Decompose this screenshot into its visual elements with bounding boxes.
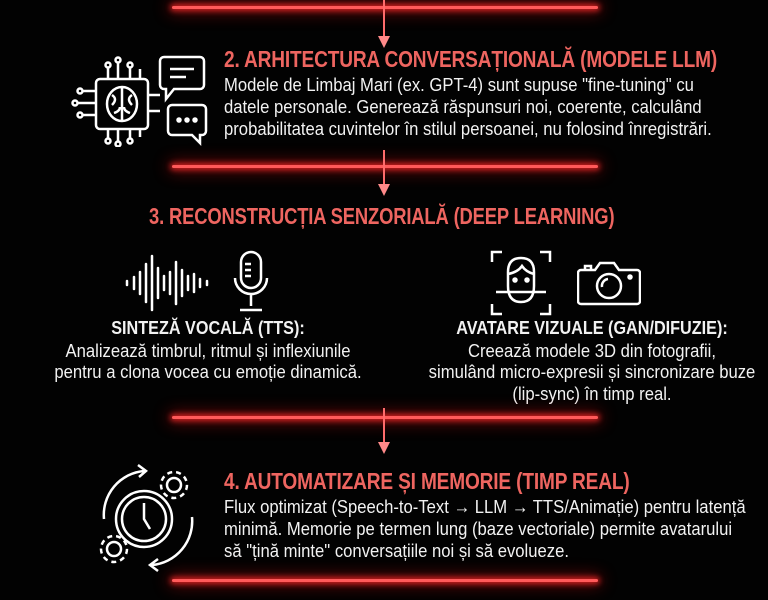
label: voice synthesis: SINTEZĂ VOCALĂ (TTS): [111,318,305,338]
icon: clock with gears and cycle [100,464,194,572]
arrow 3 [378,408,390,454]
body 4: să "țină minte" conversațiile noi și să evolueze. [224,540,569,561]
icon: microphone [234,250,268,312]
label: visual avatars: Creează modele 3D din fotografii, [468,340,716,360]
body 2: probabilitatea cuvintelor în stilul persoanei, nu folosind înregistrări. [224,118,712,139]
icon: waveform [126,254,208,312]
label: visual avatars: AVATARE VIZUALE (GAN/DIFUZIE): [456,318,728,338]
body 2 [224,74,712,139]
label: visual avatars [429,318,755,404]
divider glow line 2 [172,165,598,168]
body 4: Flux optimizat (Speech-to-Text → LLM → TTS/Animație) pentru latență [224,496,746,517]
divider glow line 3 [172,416,598,419]
label: voice synthesis: pentru a clona vocea cu emoție dinamică. [54,361,362,382]
body 4: minimă. Memorie pe termen lung (baze vectoriale) permite avatarului [224,518,732,539]
divider glow line 4 [172,579,598,582]
label: visual avatars: (lip-sync) în timp real. [512,382,672,404]
label: voice synthesis [54,318,362,382]
icon: face scan [490,250,552,316]
divider glow line 1 [172,6,598,9]
body 2: Modele de Limbaj Mari (ex. GPT-4) sunt supuse "fine-tuning" cu [224,74,694,95]
icon: AI brain chip with chat bubbles [71,56,208,147]
body 2: datele personale. Generează răspunsuri noi, coerente, calculând [224,96,702,117]
heading 2: 2. ARHITECTURA CONVERSAȚIONALĂ (MODELE LLM) [224,46,717,72]
body 4 [224,496,746,561]
heading 4: 4. AUTOMATIZARE ȘI MEMORIE (TIMP REAL) [224,468,630,494]
arrow 1 [378,0,390,48]
label: voice synthesis: Analizează timbrul, ritmul și inflexiunile [65,340,351,360]
label: visual avatars: simulând micro-expresii și sincronizare buze [429,361,755,382]
arrow 2 [378,150,390,196]
icon: camera [577,262,641,306]
heading 3: 3. RECONSTRUCȚIA SENZORIALĂ (DEEP LEARNING) [149,203,614,229]
